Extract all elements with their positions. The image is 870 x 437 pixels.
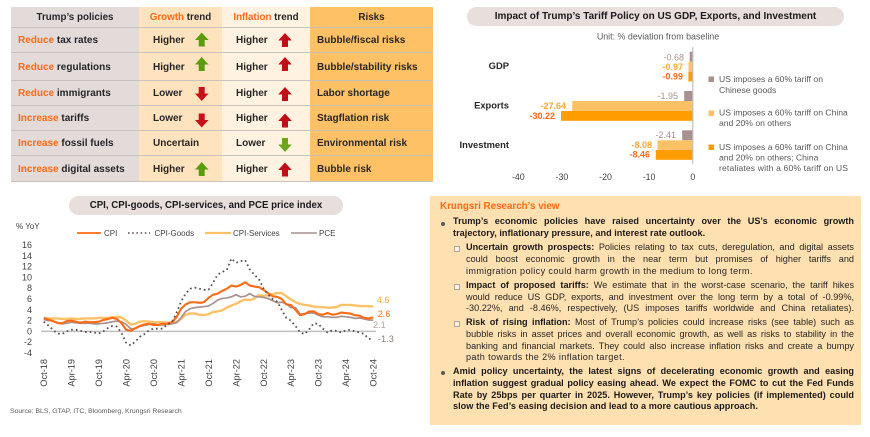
x axis labels: -20 [599,172,612,182]
end value labels [373,295,394,344]
row: reduce tax rates: Bubble/fiscal risks [317,35,405,46]
data lines [44,258,373,345]
line: CPI [44,282,373,331]
legend [708,74,848,173]
x axis labels: Apr-21 [176,359,186,387]
bullet: policy easing outlook: inflation suggest gradual policy easing ahead. We expect the FOMC to cut the Fed Funds [453,378,854,388]
y axis labels: -4 [24,348,32,358]
row: reduce tax rates: Reduce tax rates [18,35,98,46]
heading: CPI chart title: CPI, CPI-goods, CPI-services, and PCE price index [90,200,322,211]
checkbox markers [454,246,460,327]
y axis labels: 4 [27,305,32,315]
y axis labels: 2 [27,316,32,326]
sub-bullet: uncertain growth prospects: could boost economic growth in the near term but promises of higher tariffs and [466,254,854,264]
bars: scenario 3 [561,72,693,160]
bar value labels [529,52,684,160]
x axis labels: 0 [690,172,695,182]
y axis labels: 0 [27,326,32,336]
y axis title: % YoY [16,222,40,231]
bullet: uncertainty summary: trajectory, inflationary pressure, and interest rate outlook. [453,228,705,238]
legend: and 20% on others [719,118,791,128]
sub-bullet: risk of rising inflation: Risk of rising inflation: Most of Trump’s policies could increase risks (see table) such as [466,317,854,327]
bullet: uncertainty summary [453,216,854,238]
sub-bullet: impact of proposed tariffs: -30.22%, and -8.46%, respectively, (US imposes tariffs worldwide and China retaliates). [466,303,854,313]
x axis labels: Oct-23 [314,359,324,387]
category labels: Exports [474,100,509,110]
bars: scenario 2 [572,62,693,150]
chart: CPI line chart [16,222,394,387]
bars: scenario 1 [682,52,693,140]
y axis labels: 16 [22,240,32,250]
x axis labels: Apr-23 [286,359,296,387]
row: reduce immigrants: Labor shortage [317,88,390,99]
row: increase digital assets: Higher [236,164,268,174]
bullet: policy easing outlook [453,366,854,411]
y axis labels: 6 [27,294,32,304]
unit label: Unit: % deviation from baseline [597,32,719,42]
row: reduce immigrants: Higher [236,88,268,99]
y axis labels: 14 [22,251,32,261]
bar value labels: -8.46 [629,150,650,160]
row: increase digital assets: Higher [153,164,185,174]
table header row: Risks [358,12,385,23]
bullet markers [441,222,445,375]
heading: tariff chart title [467,7,844,26]
row: increase fossil fuels: Increase fossil fuels [18,138,114,149]
x axis labels: Oct-19 [94,359,104,387]
x axis labels: -30 [556,172,568,182]
icons: trend arrows [195,32,292,176]
end value labels: 2.1 [373,320,386,330]
legend: and 20% on others; China [719,152,819,162]
table header row: Inflation trend [233,12,299,23]
x axis labels: Oct-20 [149,359,159,387]
line: CPI-Goods [44,258,373,345]
row: increase tariffs: Increase tariffs [18,113,89,124]
row: reduce tax rates [11,28,433,53]
bar value labels: -0.68 [663,52,684,62]
icon: growth arrows up [195,32,208,176]
bar value labels: -8.08 [631,140,652,150]
legend [77,229,335,238]
row: increase fossil fuels [11,131,433,156]
row: reduce regulations: Bubble/stability risks [317,62,418,72]
legend: US imposes a 60% tariff on [719,74,823,84]
bullet: policy easing outlook: Rate by 25bps per quarter in 2025. However, Trump’s key policies (if implemented) could [453,390,854,400]
table header row: Trump’s policies [37,12,113,23]
row: reduce regulations: Higher [236,62,268,72]
row: reduce immigrants: Lower [153,88,182,99]
sub-bullet: risk of rising inflation: path towards the 2% inflation target. [466,352,625,362]
row: increase tariffs: Stagflation risk [317,113,389,124]
category labels [460,60,509,150]
row: increase fossil fuels: Environmental risk [317,138,407,149]
icon: inflation arrow down [278,138,292,152]
y axis labels: 12 [22,262,32,272]
x axis labels: Apr-19 [66,359,76,387]
legend: retaliates with a 60% tariff on US [719,163,848,173]
bar value labels: -27.64 [540,101,566,111]
row: increase tariffs: Lower [153,113,182,124]
bullet: policy easing outlook: slow the Fed’s easing decision and lead to a more cautious approach. [453,401,758,411]
y axis labels [22,240,32,358]
row: reduce tax rates: Higher [153,35,185,46]
line: CPI-Services [44,293,373,324]
panel: policy table [11,7,433,182]
y axis labels: 10 [22,272,32,282]
legend: PCE [319,229,335,238]
sub-bullet: risk of rising inflation [466,317,854,362]
x axis labels [512,172,695,182]
y axis labels: 8 [27,283,32,293]
x axis labels [39,359,379,387]
table header row: Growth trend [150,12,211,23]
legend: US imposes a 60% tariff on China [719,108,848,118]
row: increase digital assets: Increase digital assets [18,164,125,174]
row: increase fossil fuels: Lower [236,138,265,149]
sub-bullet: impact of proposed tariffs [466,280,854,313]
sub-bullet: impact of proposed tariffs: would reduce US GDP, exports, and investment over the long term by a total of -0.99%, [466,292,854,302]
sub-bullet: uncertain growth prospects: immigration policy could harm growth in the medium to long term. [466,266,753,276]
end value labels: -1.3 [378,334,394,344]
x axis labels: -10 [643,172,656,182]
row: reduce tax rates: Higher [236,35,268,46]
source note: Source: BLS, GTAP, ITC, Bloomberg, Krungsri Research [10,408,182,415]
x axis labels: Oct-21 [204,359,214,387]
bar value labels: -0.99 [662,72,683,82]
icon: inflation arrows up [278,33,292,176]
x axis labels: Oct-22 [259,359,269,387]
row: reduce regulations: Higher [153,62,185,72]
sub-bullet: uncertain growth prospects [466,242,854,276]
x axis labels: Oct-24 [369,359,379,387]
row: increase tariffs: Higher [236,113,268,124]
heading: tariff chart title: Impact of Trump’s Tariff Policy on US GDP, Exports, and Investment [495,11,816,22]
bar value labels: -30.22 [529,111,555,121]
row: increase fossil fuels: Uncertain [153,138,199,149]
row: reduce regulations: Reduce regulations [18,62,111,72]
bar value labels: -1.95 [657,91,678,101]
bar value labels: -2.41 [655,130,676,140]
icon: growth arrows down [195,87,208,128]
x axis labels: Apr-20 [121,359,131,387]
bullet: uncertainty summary: Trump’s economic policies have raised uncertainty over the US’s economic growth [453,216,854,226]
line: PCE [44,294,373,329]
bullet: policy easing outlook: Amid policy uncertainty, the latest signs of decelerating economic growth and easing [453,366,854,376]
row: reduce regulations [11,53,433,81]
row: increase digital assets: Bubble risk [317,164,371,174]
end value labels: 2.6 [378,309,390,319]
row: reduce immigrants [11,81,433,106]
end value labels: 4.6 [377,295,389,305]
legend: CPI-Services [233,229,280,238]
sub-bullet: impact of proposed tariffs: Impact of proposed tariffs: We estimate that in the worst-case scenario, the tariff hikes [466,280,854,290]
x axis labels: Apr-22 [231,359,241,387]
category labels: GDP [489,60,509,71]
panel: Krungsri Research's view [430,196,861,425]
chart: tariff impact bar chart [460,32,848,182]
category labels: Investment [460,139,509,150]
sub-bullet: risk of rising inflation: bubble risks in asset prices and overall economic growth, as well as risks to stability in the [466,329,854,339]
x axis labels: Apr-24 [341,359,351,387]
sub-bullet: uncertain growth prospects: Uncertain growth prospects: Policies relating to tax cuts, deregulation, and digital assets [466,242,854,252]
sub-bullet: risk of rising inflation: banking and financial markets. They could also increase inflation risks and create a bumpy [466,341,854,351]
y axis labels: -2 [24,337,32,347]
legend: CPI [104,229,117,238]
row: increase digital assets [11,156,433,182]
x axis labels: -40 [512,172,525,182]
legend: Chinese goods [719,85,776,95]
row: reduce immigrants: Reduce immigrants [18,88,111,99]
legend: CPI-Goods [154,229,194,238]
row: increase tariffs [11,106,433,131]
table header row [11,7,433,28]
x axis labels: Oct-18 [39,359,49,387]
bar value labels: -0.97 [662,62,683,72]
panel heading: Krungsri Research’s view [440,201,559,212]
heading: CPI chart title [69,196,343,215]
legend: US imposes a 60% tariff on China [719,142,848,152]
